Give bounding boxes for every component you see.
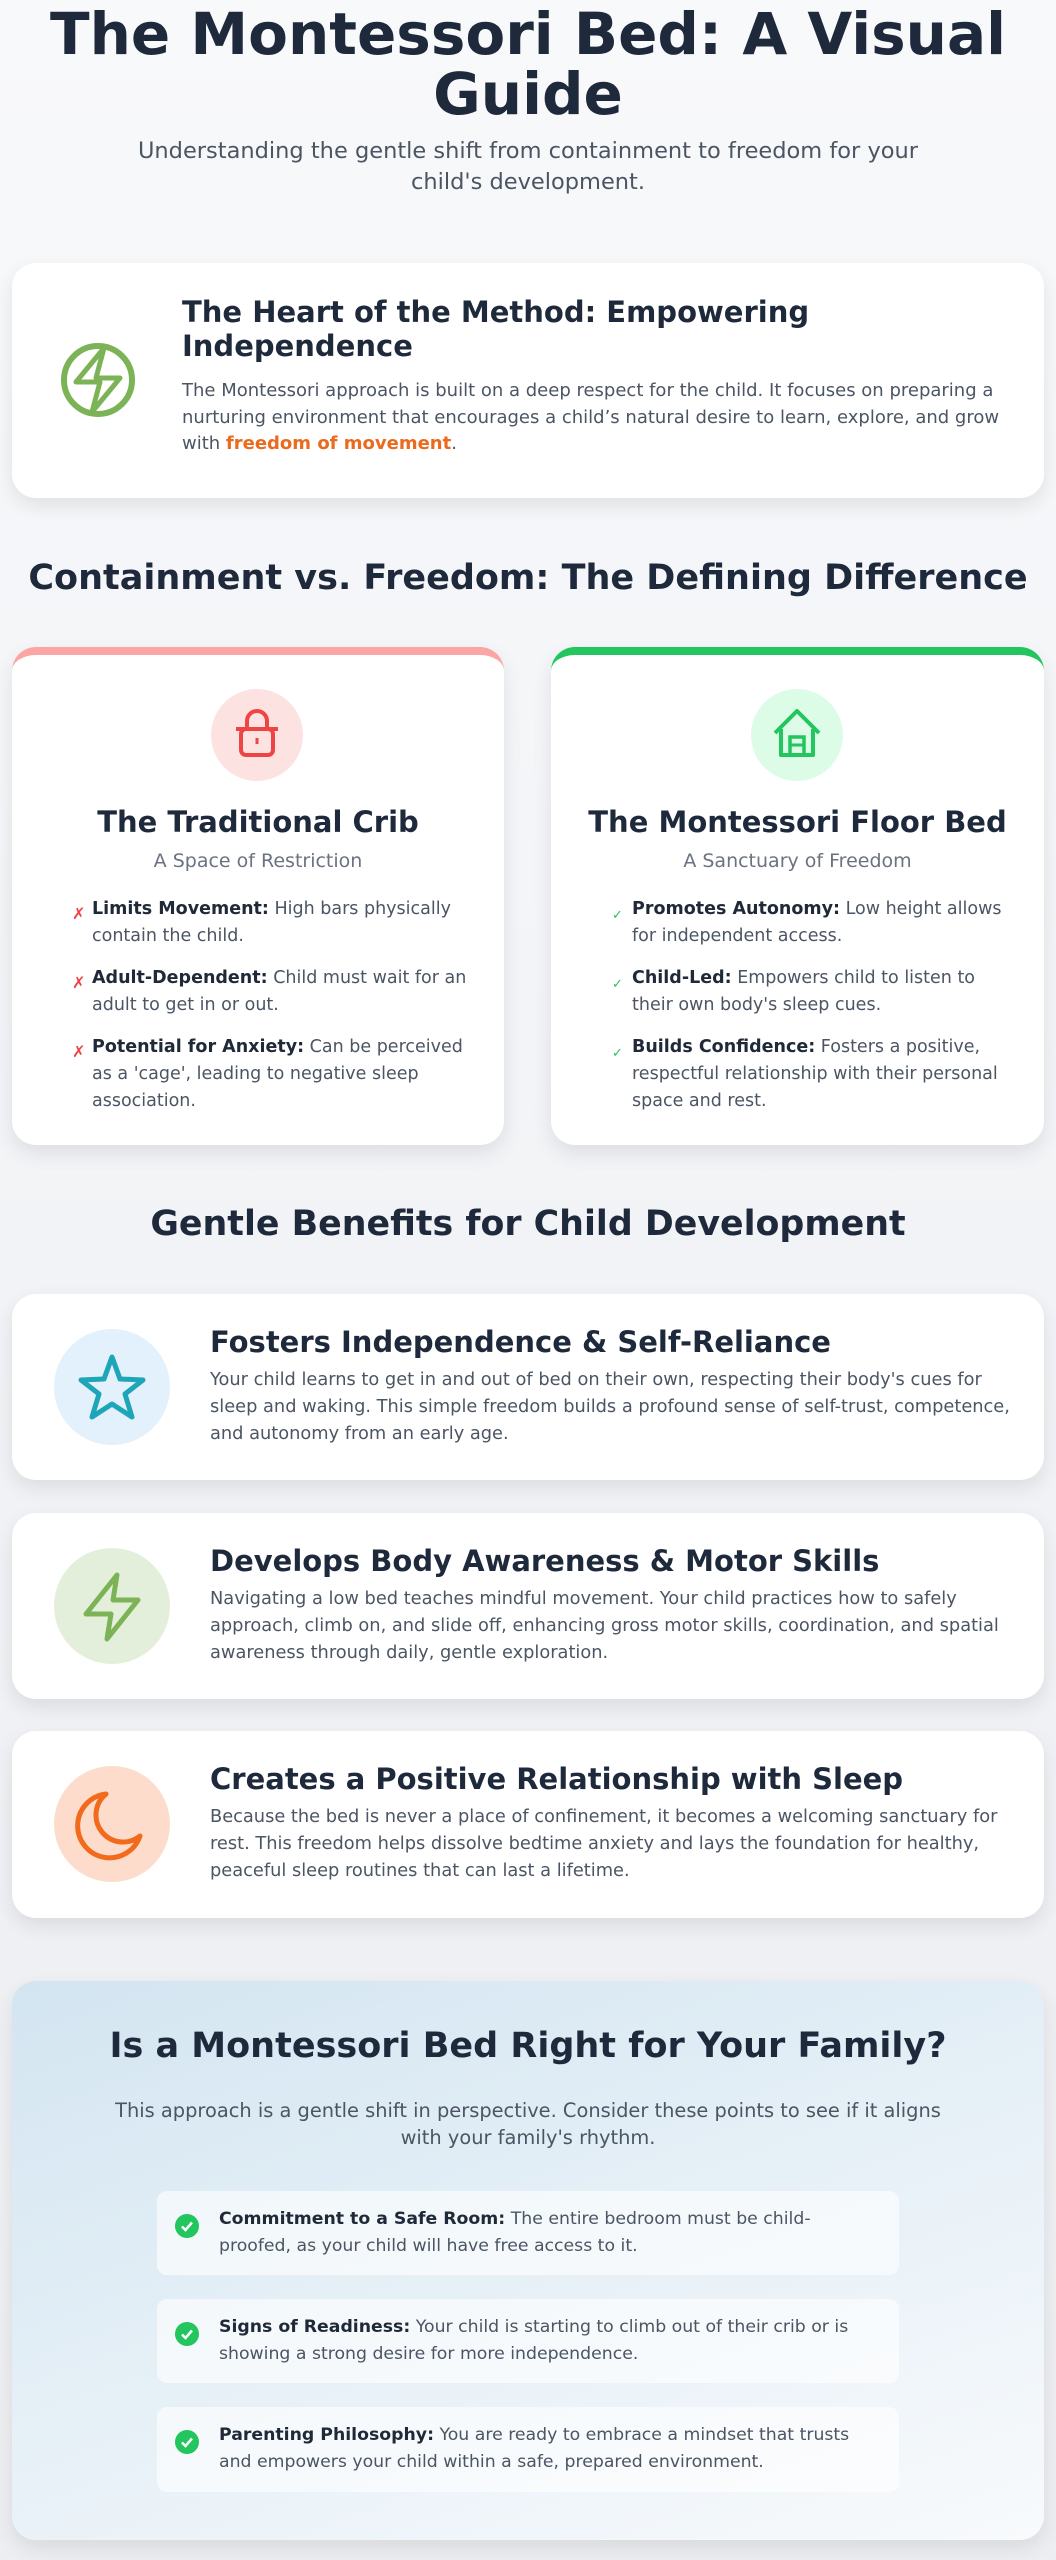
list: crib drawbacks <box>72 899 466 1111</box>
panel: montessori floor bed: ✓ <box>612 908 623 923</box>
panel: montessori floor bed: ✓ <box>612 977 623 992</box>
panel: traditional crib: ✗ <box>72 1042 85 1061</box>
list: crib drawbacks: Potential for Anxiety: Can be perceived as a 'cage', leading to negative sleep association. <box>92 1037 463 1111</box>
checklist item 3: Parenting Philosophy: You are ready to embrace a mindset that trusts and empowers your child within a safe, prepared environment. <box>219 2425 849 2472</box>
icon: bolt <box>54 1548 170 1664</box>
text: The Montessori approach is built on a deep respect for the child. It focuses on preparing a nurturing environment that encourages a child’s natural desire to learn, explore, and grow with freedom of movement. <box>182 380 999 454</box>
panel: is it right for your family <box>12 1981 1044 2540</box>
panel: montessori floor bed <box>551 647 1044 1145</box>
panel: traditional crib: ✗ <box>72 904 85 923</box>
text: Because the bed is never a place of confinement, it becomes a welcoming sanctuary for rest. This freedom helps dissolve bedtime anxiety and lays the foundation for healthy, peaceful sleep routines that can last a lifetime. <box>210 1806 997 1881</box>
checklist item 1: Commitment to a Safe Room: The entire bedroom must be child-proofed, as your child will have free access to it. <box>219 2209 811 2256</box>
checklist item 1 <box>157 2191 899 2275</box>
subtitle: A Sanctuary of Freedom <box>683 850 912 872</box>
text: Navigating a low bed teaches mindful movement. Your child practices how to safely approach, climb on, and slide off, enhancing gross motor skills, coordination, and spatial awareness through daily, gentle exploration. <box>210 1588 999 1663</box>
title: The Montessori Bed: A Visual Guide <box>50 0 1006 128</box>
benefit card: sleep <box>12 1731 1044 1918</box>
list: floor bed benefits: Builds Confidence: Fosters a positive, respectful relationship with their personal space and rest. <box>632 1037 998 1111</box>
subtitle: Understanding the gentle shift from containment to freedom for your child's development. <box>138 138 918 195</box>
panel: traditional crib: ✗ <box>72 973 85 992</box>
benefit card: motor skills <box>12 1513 1044 1699</box>
title: The Montessori Floor Bed <box>588 805 1007 839</box>
title: Creates a Positive Relationship with Sleep <box>210 1762 903 1796</box>
subtitle: A Space of Restriction <box>154 850 362 872</box>
icon: moon <box>54 1766 170 1882</box>
heading: Is a Montessori Bed Right for Your Family? <box>109 2026 947 2066</box>
section heading: containment vs freedom: Containment vs. Freedom: The Defining Difference <box>28 558 1028 598</box>
checklist item 3 <box>157 2407 899 2492</box>
panel: heart of the method <box>12 263 1044 498</box>
list: crib drawbacks: Adult-Dependent: Child must wait for an adult to get in or out. <box>92 968 466 1015</box>
icon: star <box>54 1329 170 1445</box>
title: The Traditional Crib <box>97 805 419 839</box>
icon: check <box>175 2214 199 2238</box>
list: floor bed benefits: Promotes Autonomy: Low height allows for independent access. <box>632 899 1002 946</box>
panel: montessori floor bed: ✓ <box>612 1046 623 1061</box>
title: Develops Body Awareness & Motor Skills <box>210 1544 879 1578</box>
benefit card: independence <box>12 1294 1044 1480</box>
icon: bolt circle <box>61 343 135 417</box>
list: floor bed benefits: Child-Led: Empowers child to listen to their own body's sleep cues. <box>632 968 975 1015</box>
icon: check <box>175 2430 199 2454</box>
section heading: gentle benefits: Gentle Benefits for Child Development <box>150 1204 906 1244</box>
heading: The Heart of the Method: Empowering Independence <box>182 295 809 363</box>
title: Fosters Independence & Self-Reliance <box>210 1325 831 1359</box>
icon: lock <box>211 689 303 781</box>
list: crib drawbacks: Limits Movement: High bars physically contain the child. <box>92 899 451 946</box>
checklist item 2: Signs of Readiness: Your child is starting to climb out of their crib or is showing a strong desire for more independence. <box>219 2317 848 2364</box>
checklist item 2 <box>157 2299 899 2383</box>
icon: house <box>751 689 843 781</box>
text: Your child learns to get in and out of bed on their own, respecting their body's cues for sleep and waking. This simple freedom builds a profound sense of self-trust, competence, and autonomy from an early age. <box>210 1369 1010 1444</box>
icon: check <box>175 2322 199 2346</box>
panel: traditional crib <box>12 647 504 1145</box>
list: floor bed benefits <box>612 899 1002 1111</box>
intro text: This approach is a gentle shift in perspective. Consider these points to see if it aligns with your family's rhythm. <box>115 2099 941 2149</box>
